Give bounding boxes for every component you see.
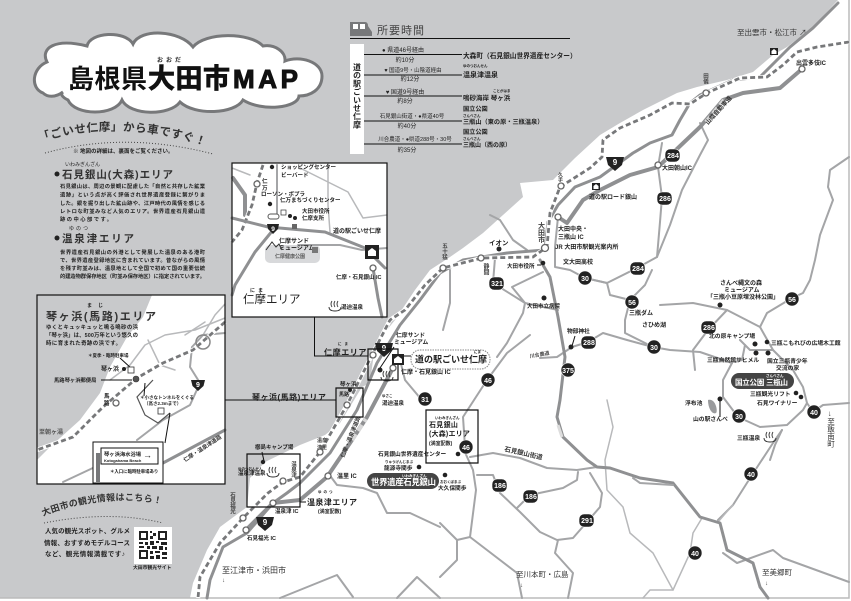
- inset: Kotogahama area: （高さ2.3mまで）: [144, 400, 181, 407]
- description: 時に育まれた奇跡の浜です。: [46, 339, 121, 347]
- destinations: 三瓶山（東の原・三瓶温泉）: [463, 118, 543, 126]
- map labels west: 馬路: [339, 391, 349, 398]
- note: ※ 地図の詳細は、裏面をご覧ください。: [73, 147, 174, 155]
- roadside station callout: にま: [474, 349, 482, 354]
- travel times panel: [350, 22, 577, 154]
- area description: 跡の中心部です。: [60, 215, 112, 223]
- destinations: [463, 51, 577, 149]
- Sanbe area labels: 三瓶温泉: [737, 434, 760, 442]
- map labels central: 五十猛: [441, 243, 448, 261]
- labels: 仁摩サンド: [279, 237, 309, 245]
- Sanbe area labels: さんべ縄文の森: [720, 279, 762, 287]
- map labels central: 大田市: [538, 221, 545, 244]
- map labels central: 三瓶ダム: [629, 309, 653, 317]
- map labels west: 仁摩・石見銀山 IC: [401, 368, 451, 376]
- route shields: 46: [484, 378, 492, 385]
- heading: 仁摩エリア: [243, 293, 300, 306]
- Omori area labels: りゅうげんじまぶ: [385, 459, 413, 464]
- labels: 道の駅ごいせ仁摩: [333, 227, 381, 235]
- destinations: 国立公園: [463, 105, 488, 113]
- map labels west: 津里: [317, 444, 327, 451]
- map labels central: 大田市立病院: [527, 302, 561, 310]
- inset: Kotogahama area: まじ: [87, 302, 109, 309]
- roadside station callout: 道の駅ごいせ仁摩: [415, 354, 487, 364]
- Nima area label: 仁摩エリア: [324, 347, 367, 357]
- destinations: さんべさん: [463, 136, 481, 141]
- map labels central: 至美郷町: [762, 567, 792, 577]
- description: ゆくとキュッキュッと鳴る鳴砂の浜: [46, 323, 139, 331]
- icon: route 9 shield: 9: [196, 382, 200, 389]
- inset: Nima area: にま: [250, 287, 266, 294]
- Omori area labels: いわみぎんざん: [435, 415, 460, 420]
- Sanbe area labels: 山の駅さんべ: [693, 415, 728, 423]
- destinations: 三瓶山（西の原）: [463, 141, 511, 149]
- map labels west: 温泉津: [290, 460, 297, 479]
- map labels west: 石見福光: [229, 492, 236, 515]
- route shields: 291: [581, 518, 593, 525]
- route shields: 46: [462, 445, 470, 452]
- description: 情報、おすすめモデルコース: [44, 538, 130, 547]
- route shields: 186: [525, 494, 537, 501]
- route rows: ♥ 国道9号・山陰道経由: [384, 66, 442, 74]
- callout: beach sign: ＊入口に臨時駐車場あり: [110, 468, 158, 475]
- title text: 大田市: [148, 64, 230, 94]
- map labels west: にま: [338, 341, 351, 346]
- map labels central: →至飯南町: [826, 410, 836, 448]
- area description: 遺跡」という点が高く評価され世界遺産登録に繋がりま: [60, 190, 205, 198]
- route shields: 40: [691, 551, 699, 558]
- description: 人気の観光スポット、グルメ: [45, 526, 130, 535]
- locator frames and connectors: [225, 317, 478, 507]
- area description: 世界遺産石見銀山の外港として発展した温泉のある港町: [60, 248, 206, 256]
- labels: [261, 163, 382, 311]
- title ruby: おおだ: [157, 56, 184, 64]
- destinations: ゆのつおんせん: [463, 63, 488, 68]
- route shields: 375: [562, 368, 574, 375]
- destinations: 国立公園: [463, 128, 488, 136]
- map labels central: イオン: [489, 239, 509, 247]
- map labels west: 湯迫温泉: [382, 399, 405, 407]
- label: world heritage: [367, 473, 439, 489]
- route rows: 約10分: [396, 56, 414, 64]
- route rows: ● 県道46号経由: [382, 46, 424, 54]
- callout: beach sign: [93, 442, 163, 483]
- map labels central: 久手: [557, 171, 563, 183]
- interchange and station markers: [240, 66, 805, 533]
- description: [44, 526, 130, 558]
- Kotogahama area label: 琴ヶ浜(馬路)エリア: [252, 392, 326, 402]
- map labels west: 温泉津 IC: [275, 507, 299, 515]
- origin label: 道の駅ごいせ仁摩: [352, 62, 362, 129]
- origin label: [350, 44, 364, 154]
- area text: Yunotsu: ゆのつ: [69, 226, 90, 232]
- callout: beach sign: Kotogahama Beach: [104, 458, 142, 463]
- map labels west: ↓: [222, 578, 225, 584]
- label: national park: さんべさん: [766, 373, 784, 378]
- Sanbe area labels: 三瓶観光リフト: [750, 390, 791, 398]
- icon: car: [350, 22, 372, 36]
- left heading arc: 「ごいせ仁摩」から車ですぐ！: [44, 121, 203, 144]
- Omori area labels: 仁摩・温泉津道路: [338, 414, 363, 459]
- map labels central: 至川本町・広島: [516, 569, 569, 579]
- area description: レトロな町並みなど人気のエリア。世界遺産石見銀山遺: [60, 207, 206, 215]
- inset: Kotogahama area: 至朝ヶ湯: [39, 428, 63, 436]
- labels: 仁万まちづくりセンター: [280, 196, 341, 204]
- labels: 湯迫温泉: [341, 303, 364, 311]
- map labels central: 至出雲市・松江市 ↗: [737, 27, 807, 37]
- route rows: 石見銀山街道・●県道40号: [380, 112, 445, 120]
- Omori area labels: 石見銀山: [429, 420, 458, 429]
- Omori area labels: [338, 414, 544, 492]
- route rows: ♥ 国道9号経由: [386, 88, 424, 96]
- destinations: ことがはま: [493, 88, 511, 93]
- map labels central: 川合農道: [529, 350, 550, 360]
- map labels central: 山陰自動車道: [704, 94, 734, 126]
- icon: route 9 shield: 9: [271, 226, 275, 233]
- map labels west: (満室配数): [318, 508, 342, 515]
- roadside station callout: [392, 349, 490, 369]
- icon: roadside station: [365, 245, 379, 259]
- route shields: 9: [613, 158, 618, 167]
- label: world heritage: いわみぎんざん: [402, 473, 427, 478]
- area description: 石見銀山は、周辺の景観に配慮した「自然と共存した鉱業: [60, 182, 206, 190]
- map labels central: ↓: [520, 583, 523, 589]
- route rows: 約12分: [401, 75, 419, 83]
- route shields: 286: [659, 196, 671, 203]
- area text: Yunotsu: [54, 226, 206, 280]
- route shields: 40: [747, 472, 755, 479]
- tourism info block: [42, 493, 172, 571]
- map labels west: 温里 IC: [337, 472, 357, 480]
- Sanbe area labels: 石見ワイナリー: [757, 400, 798, 407]
- labels: 仁摩・石見銀山 IC: [336, 273, 382, 281]
- heading: 大田市の観光情報はこちら！: [42, 493, 159, 516]
- map labels central: 大田朝山IC: [662, 164, 693, 172]
- inset: Kotogahama area: ＊小さなトンネルをくぐる: [140, 394, 194, 401]
- inset: Kotogahama area: 路: [104, 399, 110, 407]
- Sanbe area labels: 国立三瓶青少年: [767, 357, 808, 365]
- map labels central: 田儀: [702, 73, 709, 85]
- description: 「琴ヶ浜」は、500万年という悠久の: [46, 331, 138, 339]
- area description: した。銀を掘り出した鉱山跡や、江戸時代の風情を感じる: [60, 199, 205, 207]
- national routes: [540, 260, 768, 598]
- map labels west: 至江津市・浜田市: [222, 565, 286, 575]
- map labels central: 出雲多伎IC: [796, 59, 827, 67]
- map labels west: 仁摩サンド: [396, 331, 425, 339]
- route rows: 川合農道・●県道288号・30号: [378, 135, 452, 143]
- title cloud: [34, 33, 322, 112]
- map labels central: 大田中央・: [558, 225, 588, 233]
- heading: 琴ヶ浜(馬路)エリア: [46, 309, 156, 323]
- Omori area labels: 石見銀山街道: [504, 444, 544, 462]
- Sanbe area labels: 三瓶自然館サヒメル: [707, 356, 759, 364]
- labels: ローソン・ポプラ: [261, 190, 305, 198]
- destinations: 大森町（石見銀山世界遺産センター）: [463, 51, 577, 60]
- route shields: 40: [810, 410, 818, 417]
- QR caption: 大田市観光サイト: [133, 564, 172, 571]
- map labels central: 静間: [482, 262, 489, 276]
- map labels central: [441, 27, 836, 589]
- map labels central: 物部神社: [567, 327, 590, 335]
- QR code: [134, 527, 172, 564]
- title text: 島根県: [68, 64, 147, 94]
- map labels west: 琴ヶ浜: [340, 380, 357, 388]
- area description: [60, 182, 206, 223]
- map labels west: ゆのつおんせん: [238, 466, 263, 471]
- Omori area labels: おおくぼまぶ: [440, 479, 461, 484]
- destinations: 温泉津温泉: [463, 70, 498, 79]
- destinations: 鳴砂海岸 琴ヶ浜: [463, 93, 511, 102]
- map labels central: 三瓶山 IC: [558, 233, 584, 241]
- route shields: 9: [263, 518, 268, 527]
- route shields: 288: [583, 340, 595, 347]
- Sanbe area labels: [685, 279, 841, 442]
- area text: Iwami Ginzan: いわみぎんざん: [65, 161, 100, 168]
- labels: ビーバード: [281, 171, 308, 179]
- label: national park: [731, 373, 794, 389]
- map labels west: 石見福光 IC: [247, 534, 276, 542]
- icon: mountain: [266, 242, 282, 250]
- destinations: さんべさん: [463, 113, 481, 118]
- area description: で、世界遺産登録地区に含まれています。昔ながらの風情: [60, 256, 206, 264]
- inset: Kotogahama area: 馬: [104, 393, 110, 400]
- icon: route 9 shield: [191, 380, 205, 391]
- Sanbe area labels: 「三瓶小豆原埋没林公園」: [707, 293, 779, 301]
- route shields: [256, 149, 821, 560]
- labels: 大田市役所: [302, 207, 330, 215]
- Sanbe area labels: ミュージアム: [724, 287, 759, 294]
- callout: beach sign: 琴ヶ浜海水浴場: [104, 450, 142, 458]
- icon: hot spring: [329, 301, 341, 311]
- callout: beach sign: →: [143, 450, 152, 460]
- Sanbe area labels: 交流の家: [776, 364, 799, 372]
- map labels west: 櫛島キャンプ場: [255, 443, 294, 451]
- route shields: 284: [667, 153, 679, 160]
- route rows: 約8分: [397, 97, 413, 105]
- map labels west: ミュージアム: [394, 339, 428, 346]
- route rows: 約40分: [398, 122, 416, 130]
- route rows: [378, 46, 452, 154]
- notes and labels: ＊夏季・臨時駐車場: [88, 352, 129, 359]
- map labels west: 温泉津温泉: [238, 469, 266, 477]
- description: など、観光情報満載です♪: [45, 549, 125, 558]
- map labels west: [222, 331, 451, 584]
- icon: route 9 shield: [267, 224, 279, 234]
- route shields: 286: [703, 325, 715, 332]
- inset: Kotogahama area: 琴ヶ浜: [101, 365, 119, 373]
- labels: ミュージアム: [279, 245, 314, 252]
- label: world heritage: 世界遺産石見銀山: [371, 477, 436, 487]
- map labels central: 大田市役所: [507, 262, 535, 270]
- map labels central: さひめ湖: [642, 321, 666, 329]
- route shields: 186: [494, 483, 506, 490]
- map labels west: ゆのつ: [318, 489, 334, 494]
- title text: MAP: [233, 64, 298, 94]
- heading: travel time: 所要時間: [377, 23, 425, 37]
- labels: 仁摩健康公園: [275, 253, 305, 260]
- area text: Iwami Ginzan: [54, 161, 206, 223]
- label: national park: 国立公園 三瓶山: [735, 377, 788, 387]
- Sanbe area labels: 北の原キャンプ場: [709, 332, 755, 340]
- area description: 的建造物群保存地区（町並み保存地区）に指定されています。: [60, 272, 205, 280]
- inset: Nima area: [232, 163, 387, 317]
- map labels central: 道の駅ロード銀山: [589, 193, 637, 201]
- railway: [198, 42, 849, 598]
- route shields: 30: [735, 414, 743, 421]
- map labels west: 温泉津エリア: [307, 497, 357, 507]
- map labels central: ↓: [765, 581, 768, 587]
- area description: を残す町並みは、温泉地として全国で初めて国の重要伝統: [60, 264, 206, 272]
- route rows: 約35分: [398, 146, 416, 154]
- inset: Kotogahama area: 仁摩・温泉津道路: [182, 433, 223, 464]
- Omori area labels: (大森)エリア: [429, 429, 470, 438]
- Omori area labels: 石見銀山世界遺産センター: [378, 450, 447, 458]
- route shields: 56: [788, 297, 796, 304]
- map labels west: ゆさこ: [382, 393, 392, 398]
- inset: Kotogahama area: [37, 295, 225, 484]
- route shields: 9: [382, 344, 387, 353]
- labels: 万: [262, 185, 268, 192]
- map labels central: 文大田高校: [563, 258, 593, 266]
- Omori area labels: 大久保間歩: [438, 484, 467, 492]
- route shields: 31: [421, 397, 429, 404]
- labels: 仁摩支所: [302, 214, 325, 222]
- area heading: 温泉津エリア: [62, 232, 134, 245]
- map labels west: 温泉: [317, 437, 327, 444]
- Omori area labels: 龍源寺間歩: [384, 464, 413, 472]
- expressway: [558, 69, 802, 223]
- Omori area labels: (満室配数): [429, 440, 453, 447]
- description: [46, 323, 139, 347]
- area description: [60, 248, 206, 280]
- Sanbe area labels: 三瓶こもれびの広場木工館: [771, 339, 841, 347]
- route shields: 56: [628, 300, 636, 307]
- labels: 仁: [262, 177, 268, 185]
- road network: [198, 3, 849, 598]
- labels: ショッピングセンター: [281, 163, 336, 171]
- area heading: 石見銀山(大森)エリア: [62, 168, 174, 181]
- map labels central: JR 大田市駅観光案内所: [555, 243, 618, 251]
- Sanbe area labels: 浮布池: [685, 399, 703, 407]
- route shields: 321: [491, 281, 503, 288]
- route shields: 284: [632, 266, 644, 273]
- route shields: 30: [650, 345, 658, 352]
- inset: Kotogahama area: 馬路琴ヶ浜郵便局: [54, 376, 96, 384]
- route shields: 30: [581, 276, 589, 283]
